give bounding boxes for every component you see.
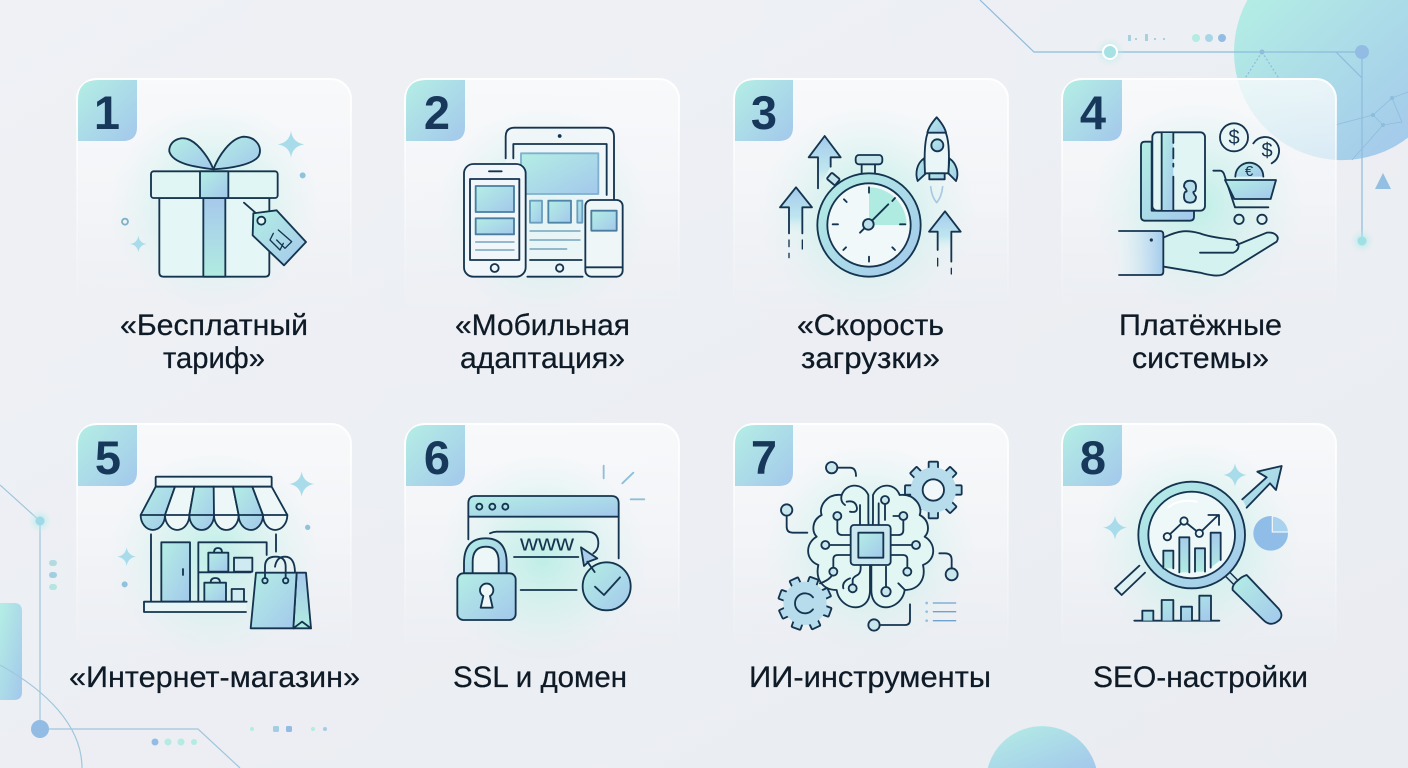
badge 2: 2 [424,86,450,139]
label 1: «Бесплатный [120,309,308,342]
badge 4 [1063,80,1122,141]
icon: browser, padlock and check [457,466,644,620]
label 2 [455,309,630,375]
panel: card 8 SEO settings [1062,424,1336,694]
label 3: загрузки» [801,342,940,375]
badge 5: 5 [95,431,121,484]
badge 6: 6 [424,431,450,484]
badge 7 [735,425,793,486]
panel: card 5 online store [69,424,360,694]
icon: gift box with tag [122,131,306,277]
panel: card 4 payment systems [1062,79,1336,375]
coin symbols: € [1245,163,1254,180]
icon: storefront and shopping bag [117,471,314,628]
label 8: SEO-настройки [1093,661,1308,694]
badge 8 [1063,425,1122,486]
panel: card 3 loading speed [734,79,1008,375]
label 6: SSL и домен [453,661,627,694]
label 3 [797,309,944,375]
icon: magnifier with charts [1103,463,1289,624]
label 5: «Интернет-магазин» [69,661,360,694]
icon: responsive devices [464,128,623,277]
label 3: «Скорость [797,309,944,342]
coin symbols: $ [1228,127,1240,149]
label 4: Платёжные [1119,309,1282,342]
coin symbols: $ [1261,140,1273,162]
label 4 [1119,309,1282,375]
badge 6 [406,425,465,486]
label 7: ИИ-инструменты [749,661,991,694]
badge 4: 4 [1080,86,1106,139]
badge 3 [735,80,793,141]
label 2: адаптация» [460,342,625,375]
label 2: «Мобильная [455,309,630,342]
badge 8: 8 [1080,431,1106,484]
badge 2 [406,80,465,141]
decoration: bottom-left network [0,485,327,768]
decoration: top-right network [980,0,1408,253]
label 1 [120,309,308,375]
label 1: тариф» [163,342,265,375]
panel: card 1 free plan [77,79,351,375]
badge 1: 1 [94,86,120,139]
icon: browser, padlock and check: www [519,530,574,555]
icon: cards, coins, cart and hand [1119,123,1279,276]
badge 7: 7 [751,431,777,484]
panel: card 6 SSL and domain [405,424,679,694]
icon: stopwatch, rocket and arrows [780,117,961,277]
icon: brain chip and gears [778,462,962,631]
badge 1 [78,80,137,141]
badge 5 [78,425,137,486]
badge 3: 3 [751,86,777,139]
coin symbols [1228,127,1273,180]
panel: card 7 AI tools [734,424,1008,694]
decoration: bottom circle [988,726,1096,768]
panel: card 2 mobile adaptation [405,79,679,375]
label 4: системы» [1132,342,1269,375]
